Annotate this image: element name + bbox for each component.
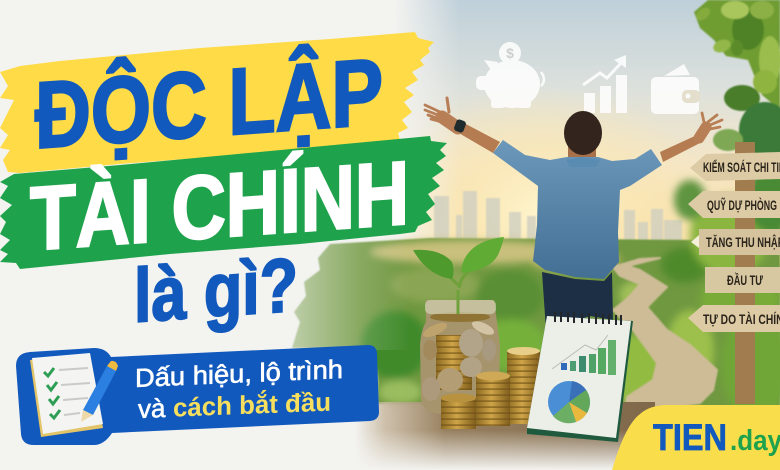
clipboard sheet	[32, 353, 103, 434]
signpost	[688, 142, 780, 404]
sign: tự do tài chính	[688, 305, 780, 332]
icon: growth chart	[583, 55, 627, 113]
photo: bottom fade	[340, 430, 640, 470]
notebook spiral	[555, 312, 621, 325]
photo: wooden table	[355, 402, 655, 470]
banner shape	[16, 345, 379, 445]
photo: winding path	[613, 258, 717, 435]
icon: wallet	[651, 64, 700, 114]
title: độc lập: ĐỘC LẬP	[35, 39, 383, 168]
neck	[568, 144, 596, 159]
sign: kiểm soát chi tiêu	[690, 152, 780, 181]
tall stack	[507, 347, 540, 424]
right arm	[660, 135, 702, 162]
notebook back	[527, 316, 633, 442]
subtitle line 2	[138, 387, 331, 424]
photo: city skyline	[434, 191, 682, 246]
right hand	[699, 113, 722, 138]
middle stack	[476, 372, 510, 426]
seedling right leaf	[461, 237, 504, 273]
list lines	[59, 368, 90, 415]
post	[735, 142, 755, 404]
yellow brush stroke	[0, 32, 434, 173]
notebook page	[527, 316, 631, 438]
subtitle banner	[16, 345, 379, 445]
coin jar with seedling	[413, 237, 504, 414]
seedling left leaf	[413, 250, 454, 279]
left arm	[457, 122, 500, 153]
word: và: và	[138, 393, 166, 424]
icons: white savings and growth pictograms	[476, 42, 700, 114]
word: cách bắt đầu: cách bắt đầu	[173, 387, 331, 423]
shirt	[493, 140, 662, 279]
trousers	[542, 272, 613, 330]
brand badge	[612, 405, 780, 470]
left hand	[425, 98, 458, 128]
sign: quỹ dự phòng	[688, 191, 780, 218]
person with raised arms	[425, 98, 722, 330]
collar	[566, 157, 600, 167]
jar body	[420, 300, 500, 414]
logo text: TIEN	[653, 417, 727, 458]
icon: piggy bank	[476, 42, 544, 108]
photo: landscape	[290, 166, 780, 470]
photo: sky	[330, 0, 780, 345]
title: là gì: là gì?	[134, 243, 298, 339]
badge background	[612, 405, 780, 470]
notebook with charts	[527, 312, 633, 442]
subtitle line 1: Dấu hiệu, lộ trình	[135, 354, 343, 393]
jar rim	[425, 300, 496, 314]
sign: đầu tư	[705, 267, 780, 293]
title: tài chính: TÀI CHÍNH	[30, 143, 409, 270]
tree foliage top right	[694, 0, 780, 158]
coin stacks	[441, 347, 540, 429]
seedling stem	[451, 272, 469, 314]
checks	[44, 368, 60, 418]
bar chart	[552, 335, 616, 375]
sign: tăng thu nhập	[691, 229, 780, 255]
clipboard shadow	[30, 354, 103, 437]
sign: đầu tư: ĐẦU TƯ	[727, 273, 764, 288]
short stack	[441, 394, 476, 429]
jar coins	[421, 312, 496, 401]
icon: piggy bank: $	[506, 45, 514, 61]
pie chart	[548, 381, 590, 423]
green brush stroke	[0, 136, 447, 269]
pencil	[81, 361, 118, 422]
head hair	[564, 111, 602, 155]
icon: checklist with pencil	[30, 353, 118, 437]
wristwatch	[453, 119, 467, 133]
